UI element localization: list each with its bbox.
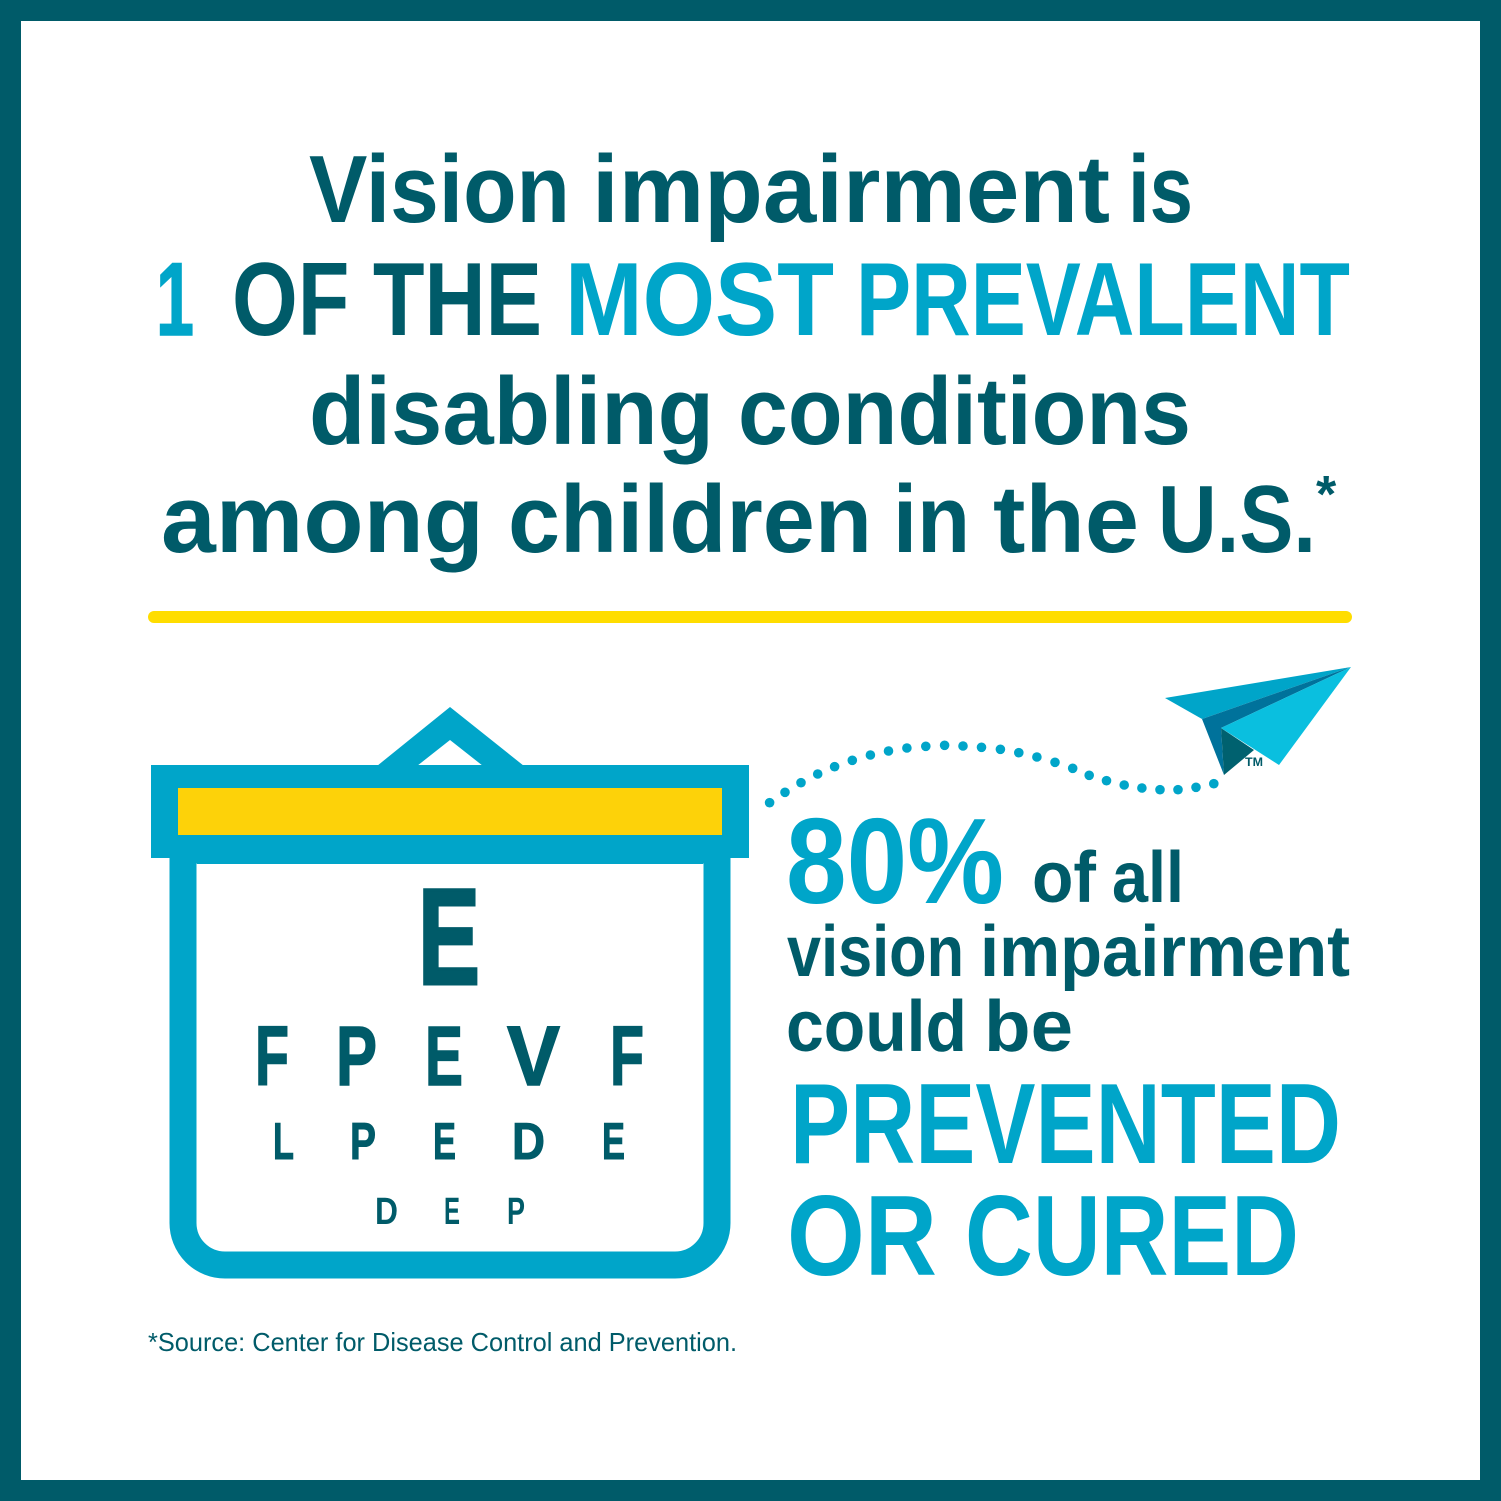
footnote asterisk: * [1316,466,1337,524]
callout text line 1: all [1112,838,1184,918]
callout text line 2: vision [787,912,964,992]
plane dark fold [1202,667,1351,775]
plane keel [1221,728,1254,775]
callout text line 1: of [1032,838,1097,918]
headline line 1: is [1128,136,1193,243]
callout text line 2: impairment [980,912,1350,992]
emphasis line 2 [787,1173,1299,1300]
chart band lower edge [197,858,703,864]
callout text line 3 [786,987,1073,1067]
headline line 2: number: 1 [156,242,194,358]
yellow divider [148,611,1352,623]
row 4: P [507,1191,525,1233]
headline line 3 [309,358,1191,465]
eye chart letters [255,861,644,1233]
callout text line 2 [787,912,1350,992]
headline line 3: disabling [309,358,714,465]
callout text line 3: could [786,987,967,1067]
dotted flight path [765,740,1219,808]
headline line 1 [309,136,1193,243]
trademark mark: TM [1245,757,1263,769]
headline line 2: most prevalent: PREVALENT [856,242,1350,358]
plane right wing [1221,667,1351,765]
chart top band [151,765,749,858]
callout text line 1 [1032,838,1184,918]
chart body [183,850,717,1265]
headline line 2: of the: OF THE [232,242,542,358]
headline line 4: in [893,466,970,573]
headline line 4: children [508,466,872,573]
row 1: E [418,861,480,1014]
emphasis line 1: PREVENTED [790,1061,1341,1188]
headline line 4: the [993,466,1139,573]
source note: *Source: Center for Disease Control and Prevention. [148,1327,737,1357]
headline line 2: most prevalent: MOST [565,242,834,358]
row 3: E [433,1113,456,1171]
statistic: 80% [786,793,1004,929]
chart hanger [377,707,524,766]
callout: 80 percent [786,793,1350,1300]
row 2: F [255,1009,289,1103]
row 4: D [375,1191,398,1233]
row 2: P [336,1009,377,1103]
icon: eye chart [151,707,749,1265]
row 2 [255,1009,644,1103]
emphasis line 2: OR [787,1173,937,1300]
headline line 4: among [161,466,484,573]
plane top wing [1165,667,1351,719]
row 4 [375,1191,525,1233]
row 3: P [350,1113,376,1171]
headline line 4: U.S. [1158,466,1316,573]
chart yellow strip [178,788,722,835]
row 3 [273,1113,625,1171]
row 2: E [425,1009,463,1103]
row 2: F [610,1009,644,1103]
row 3: L [273,1113,294,1171]
headline line 2: most prevalent [565,242,1350,358]
row 3: D [512,1113,545,1171]
row 2: V [507,1009,560,1103]
headline line 4 [161,466,1316,573]
headline [156,136,1350,573]
headline line 1: impairment [592,136,1110,243]
row 3: E [602,1113,625,1171]
headline line 1: Vision [309,136,570,243]
emphasis line 2: CURED [965,1173,1299,1300]
callout text line 3: be [984,987,1073,1067]
row 4: E [444,1191,460,1233]
icon: paper airplane [1165,667,1351,775]
headline line 3: conditions [738,358,1191,465]
